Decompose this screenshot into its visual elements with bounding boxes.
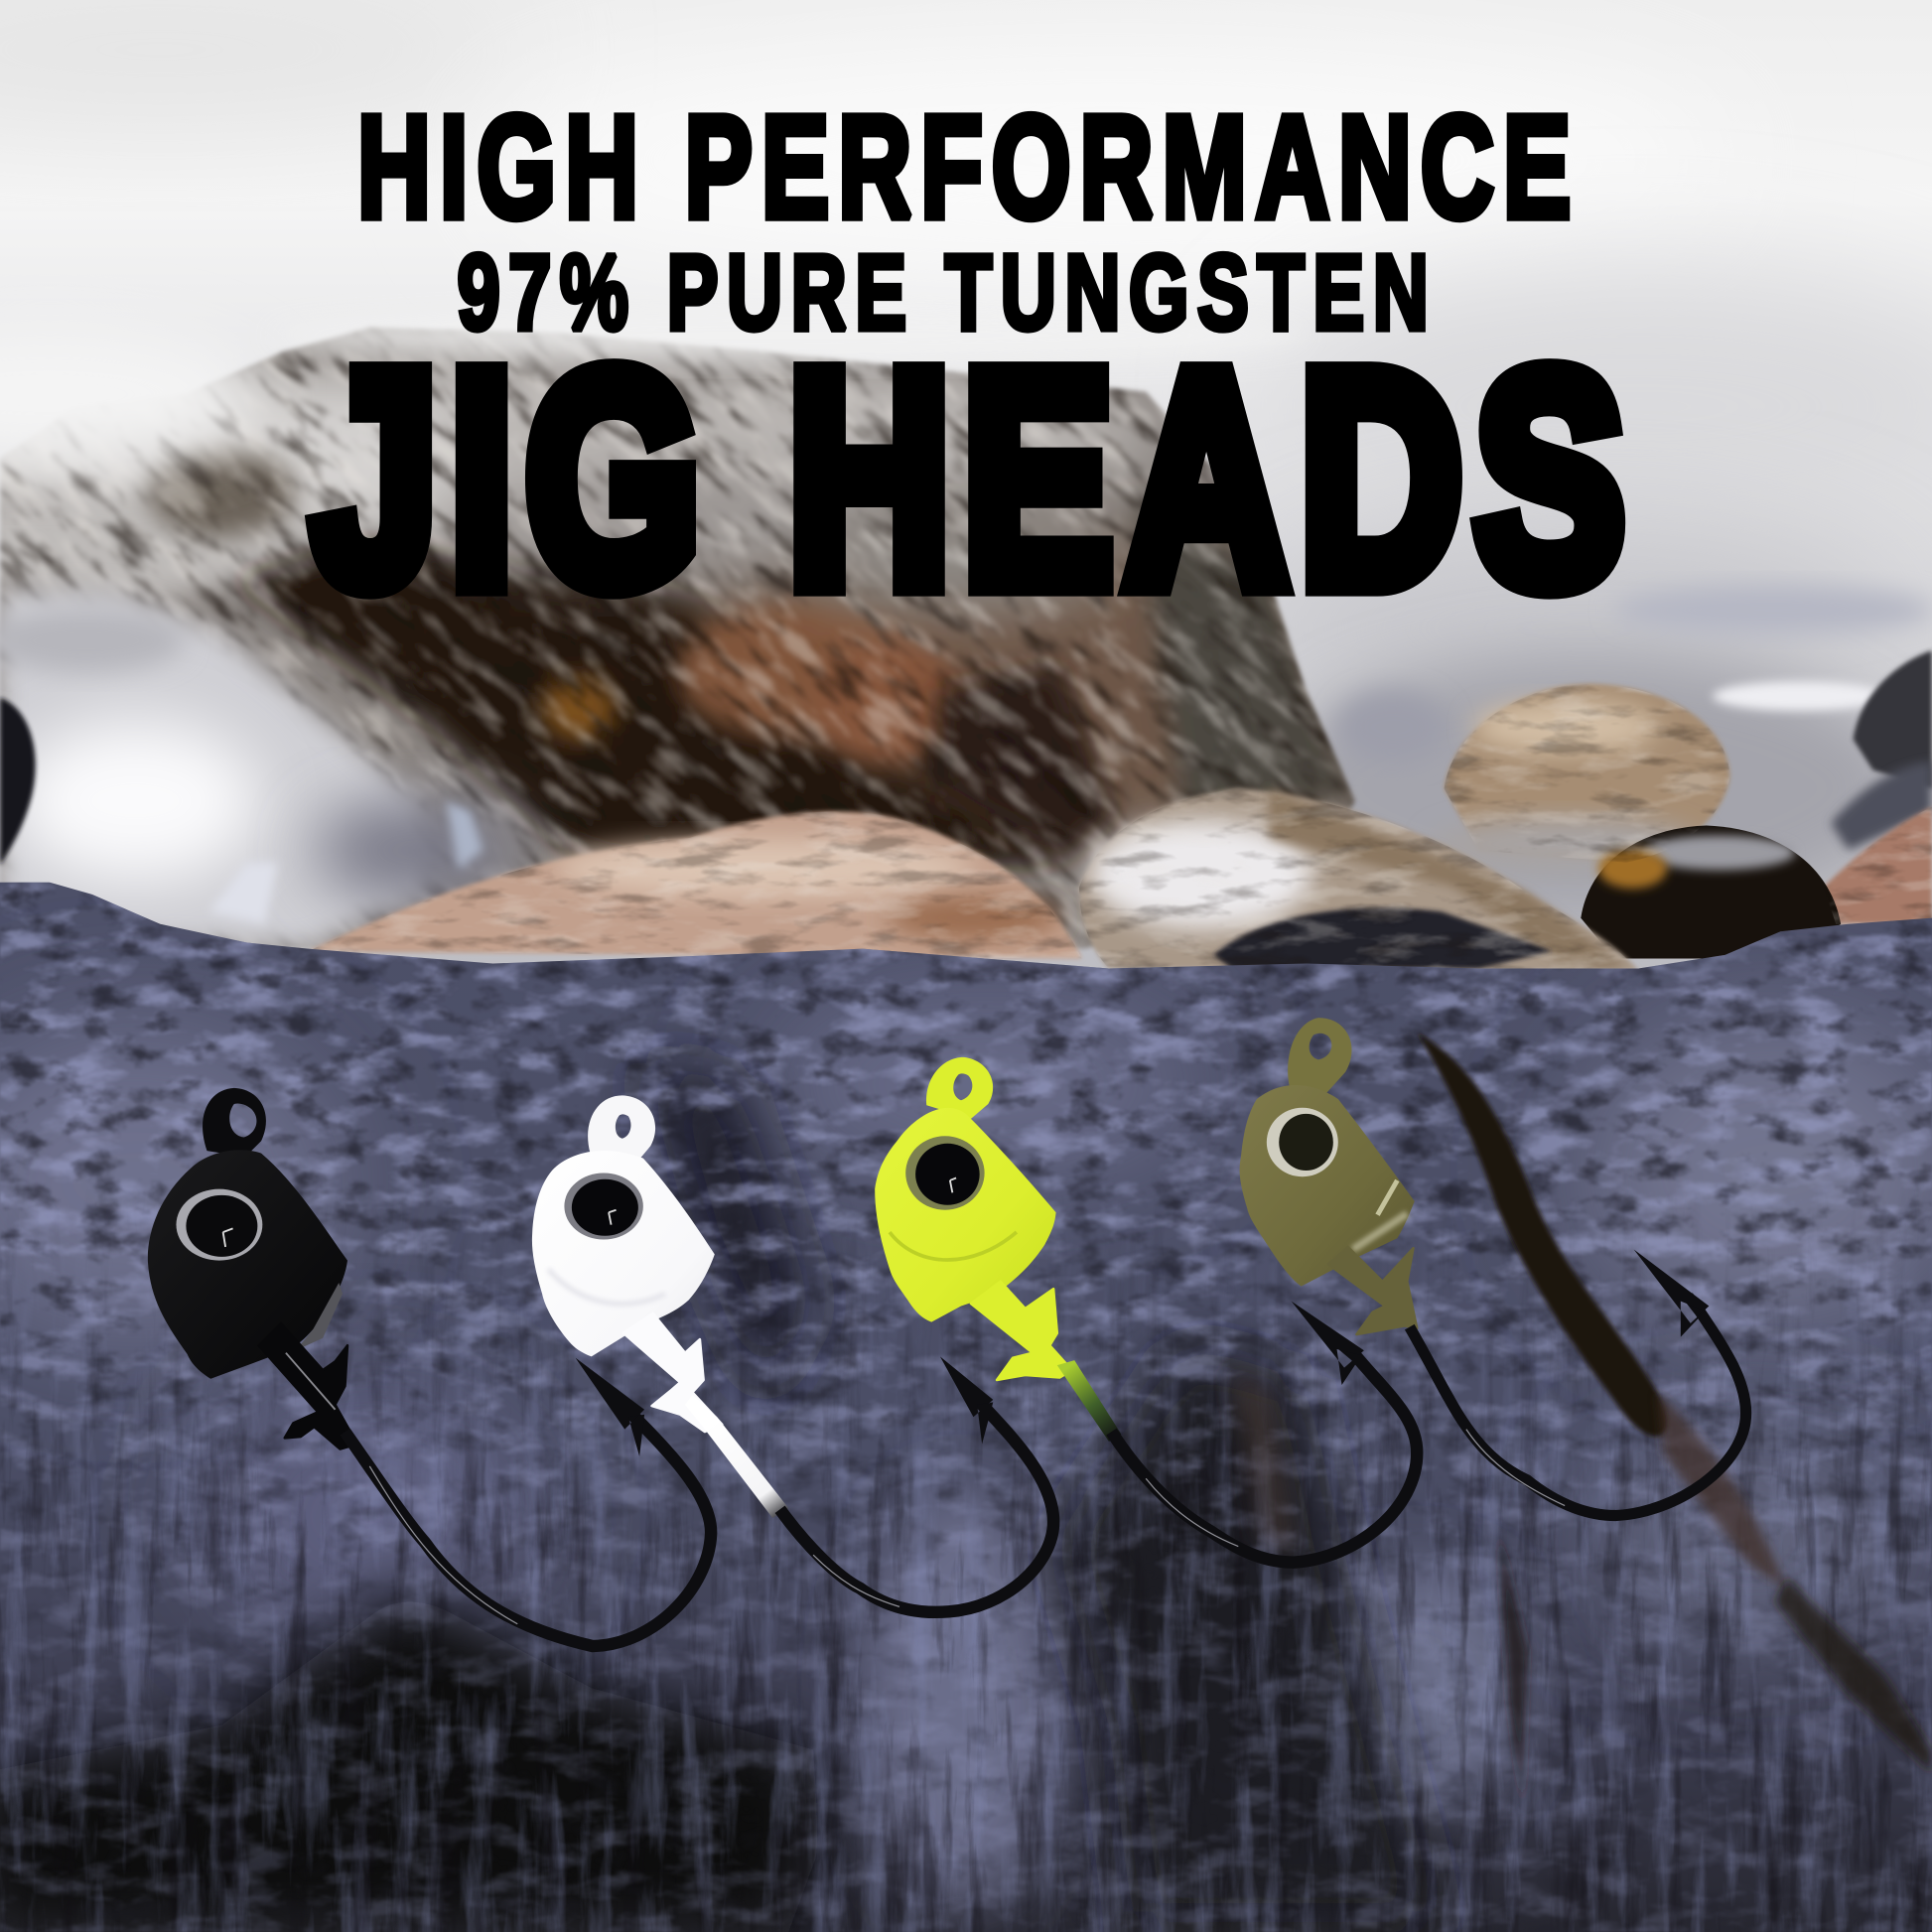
- tan round rock: [1430, 684, 1729, 871]
- texture over middle rocks: [313, 685, 1932, 969]
- headline: [313, 85, 1624, 647]
- hook: white jig: [780, 1356, 1053, 1612]
- title line 2: 97% PURE TUNGSTEN: [457, 232, 1429, 351]
- hook: chartreuse jig: [1111, 1302, 1417, 1563]
- eye: olive jig: [1267, 1108, 1338, 1176]
- eye: white jig: [564, 1173, 643, 1240]
- title line 3: JIG HEADS: [313, 310, 1624, 647]
- mist over boulder crest: [0, 308, 1307, 462]
- head body: chartreuse: [875, 1108, 1056, 1322]
- dark glossy pebble: [1581, 826, 1841, 959]
- foreground slate rock: [0, 863, 1932, 1932]
- hook: olive jig: [1410, 1249, 1746, 1516]
- line-tie eye: olive: [1288, 1018, 1352, 1097]
- dark rocks, right edge: [1824, 650, 1932, 924]
- collar and barbs: chartreuse: [971, 1282, 1072, 1380]
- jig head: olive: [1240, 1018, 1746, 1516]
- jig head: white: [532, 1095, 1053, 1612]
- large background boulder: [0, 326, 1357, 951]
- collar and barbs: olive: [1328, 1247, 1417, 1334]
- background: misty sky: [0, 0, 1932, 986]
- collar and barbs: white: [623, 1313, 722, 1432]
- head body: olive: [1240, 1085, 1415, 1287]
- title line 1: HIGH PERFORMANCE: [357, 85, 1571, 248]
- collar and barbs: black: [259, 1323, 357, 1449]
- line-tie eye: black: [203, 1088, 266, 1157]
- jig head: black: [148, 1088, 711, 1646]
- small dark rock at left edge: [0, 697, 36, 865]
- line-tie eye: chartreuse: [926, 1057, 993, 1119]
- line-tie eye: white: [588, 1095, 655, 1161]
- eye: chartreuse jig: [905, 1136, 985, 1210]
- eye: black jig: [176, 1189, 262, 1261]
- head body: black: [148, 1150, 347, 1379]
- white and brown rock: [1079, 788, 1639, 971]
- jig head: chartreuse: [875, 1057, 1417, 1563]
- hook: black jig: [345, 1358, 711, 1646]
- head body: white: [532, 1151, 715, 1356]
- mist, lower left: [0, 592, 523, 949]
- pink flat rock: [308, 811, 1082, 959]
